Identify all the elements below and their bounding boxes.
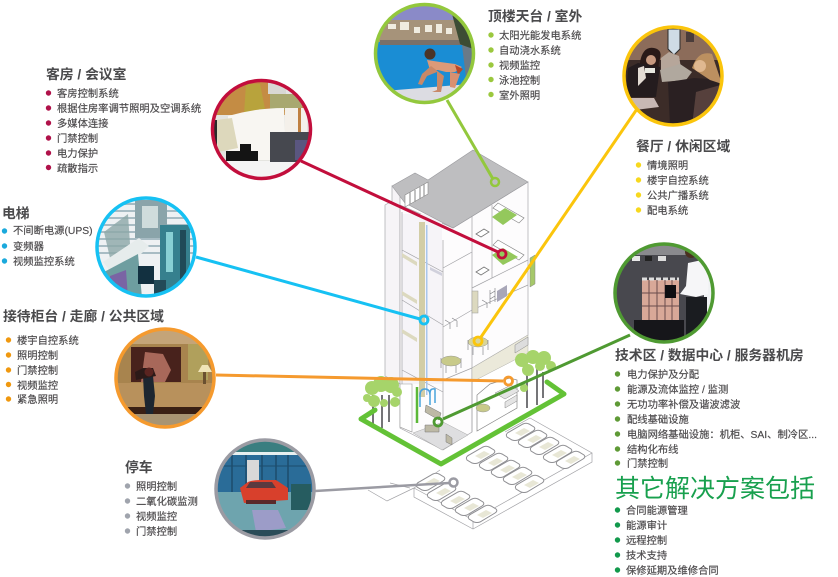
list: restaurant: 楼宇自控系统	[647, 174, 709, 187]
text block: other solutions	[615, 475, 815, 577]
list: technical room: 无功功率补偿及谐波滤波	[627, 398, 740, 411]
list: technical room: 结构化布线	[627, 443, 678, 456]
list: reception: 视频监控	[17, 379, 58, 392]
list: other solutions: 远程控制	[626, 534, 667, 547]
photo circle: elevator	[95, 196, 197, 298]
list: restaurant: 公共广播系统	[647, 189, 709, 202]
list: reception: 照明控制	[17, 349, 58, 362]
heading: technical room: 技术区 / 数据中心 / 服务器机房	[615, 347, 804, 363]
photo circle: guest room	[210, 79, 314, 181]
list: technical room: 能源及流体监控 / 监测	[627, 383, 728, 396]
text block: reception	[3, 308, 164, 406]
list: parking: 门禁控制	[136, 525, 177, 538]
connector: technical room	[434, 335, 630, 426]
list: guest room: 客房控制系统	[57, 87, 119, 100]
connector: elevator	[196, 257, 428, 324]
list: rooftop: 太阳光能发电系统	[499, 29, 581, 42]
connector: reception	[216, 375, 512, 385]
walls and floors	[385, 182, 528, 450]
list: guest room: 多媒体连接	[57, 117, 108, 130]
list: other solutions: 能源审计	[626, 519, 667, 532]
photo circle: parking	[214, 438, 316, 540]
heading: elevator: 电梯	[2, 205, 30, 221]
photo circle: technical room	[613, 243, 716, 345]
list: other solutions: 技术支持	[626, 549, 667, 562]
photo circle: rooftop pool	[372, 3, 476, 105]
list: restaurant	[636, 159, 709, 217]
list: reception: 门禁控制	[17, 364, 58, 377]
list: technical room: 电力保护及分配	[627, 368, 699, 381]
connector: restaurant	[474, 109, 637, 345]
list: reception: 紧急照明	[17, 393, 58, 406]
heading: parking: 停车	[125, 459, 153, 475]
list: guest room: 根据住房率调节照明及空调系统	[57, 102, 201, 115]
list: rooftop: 室外照明	[499, 89, 540, 102]
photo circle: restaurant	[623, 26, 724, 126]
building illustration	[361, 150, 592, 529]
green ground outline	[361, 382, 564, 464]
list: rooftop: 泳池控制	[499, 74, 540, 87]
trees	[363, 350, 556, 428]
list: guest room	[46, 87, 201, 175]
list: technical room: 电脑网络基础设施：机柜、SAI、制冷区...	[627, 428, 817, 441]
list: restaurant: 配电系统	[647, 204, 688, 217]
list: parking	[125, 480, 198, 538]
connector: guest room	[301, 161, 506, 258]
connector: rooftop	[447, 100, 499, 186]
list: rooftop	[488, 29, 581, 102]
text block: restaurant	[636, 138, 730, 217]
list: rooftop: 视频监控	[499, 59, 540, 72]
list: elevator	[2, 224, 93, 268]
text block: elevator	[2, 205, 93, 268]
text block: technical room	[615, 347, 817, 470]
parking lot	[368, 418, 592, 529]
list: guest room: 疏散指示	[57, 162, 98, 175]
heading: rooftop: 顶楼天台 / 室外	[488, 8, 582, 24]
heading: restaurant: 餐厅 / 休闲区域	[636, 138, 730, 154]
list: parking: 二氧化碳监测	[136, 495, 198, 508]
list: guest room: 电力保护	[57, 147, 98, 160]
list: guest room: 门禁控制	[57, 132, 98, 145]
heading: reception: 接待柜台 / 走廊 / 公共区域	[3, 308, 164, 324]
heading: other solutions: 其它解决方案包括	[615, 475, 815, 503]
list: other solutions: 保修延期及维修合同	[626, 564, 719, 577]
text block: rooftop	[488, 8, 582, 102]
list: other solutions	[615, 504, 719, 577]
connector: parking	[315, 478, 458, 491]
list: technical room: 门禁控制	[627, 457, 668, 470]
list: parking: 视频监控	[136, 510, 177, 523]
rooms and furniture	[413, 203, 535, 450]
list: technical room: 配线基础设施	[627, 413, 689, 426]
text block: parking	[125, 459, 198, 538]
list: parking: 照明控制	[136, 480, 177, 493]
roof	[392, 150, 528, 228]
list: restaurant: 情境照明	[647, 159, 688, 172]
list: reception	[6, 334, 79, 406]
list: reception: 楼宇自控系统	[17, 334, 79, 347]
list: other solutions: 合同能源管理	[626, 504, 688, 517]
list: elevator: 变频器	[13, 240, 44, 253]
photo circle: reception	[114, 328, 216, 430]
list: elevator: 视频监控系统	[13, 255, 75, 268]
list: elevator: 不间断电源(UPS)	[13, 224, 93, 237]
list: technical room	[615, 368, 817, 470]
heading: guest room: 客房 / 会议室	[46, 66, 127, 82]
text block: guest room	[46, 66, 201, 175]
list: rooftop: 自动浇水系统	[499, 44, 561, 57]
